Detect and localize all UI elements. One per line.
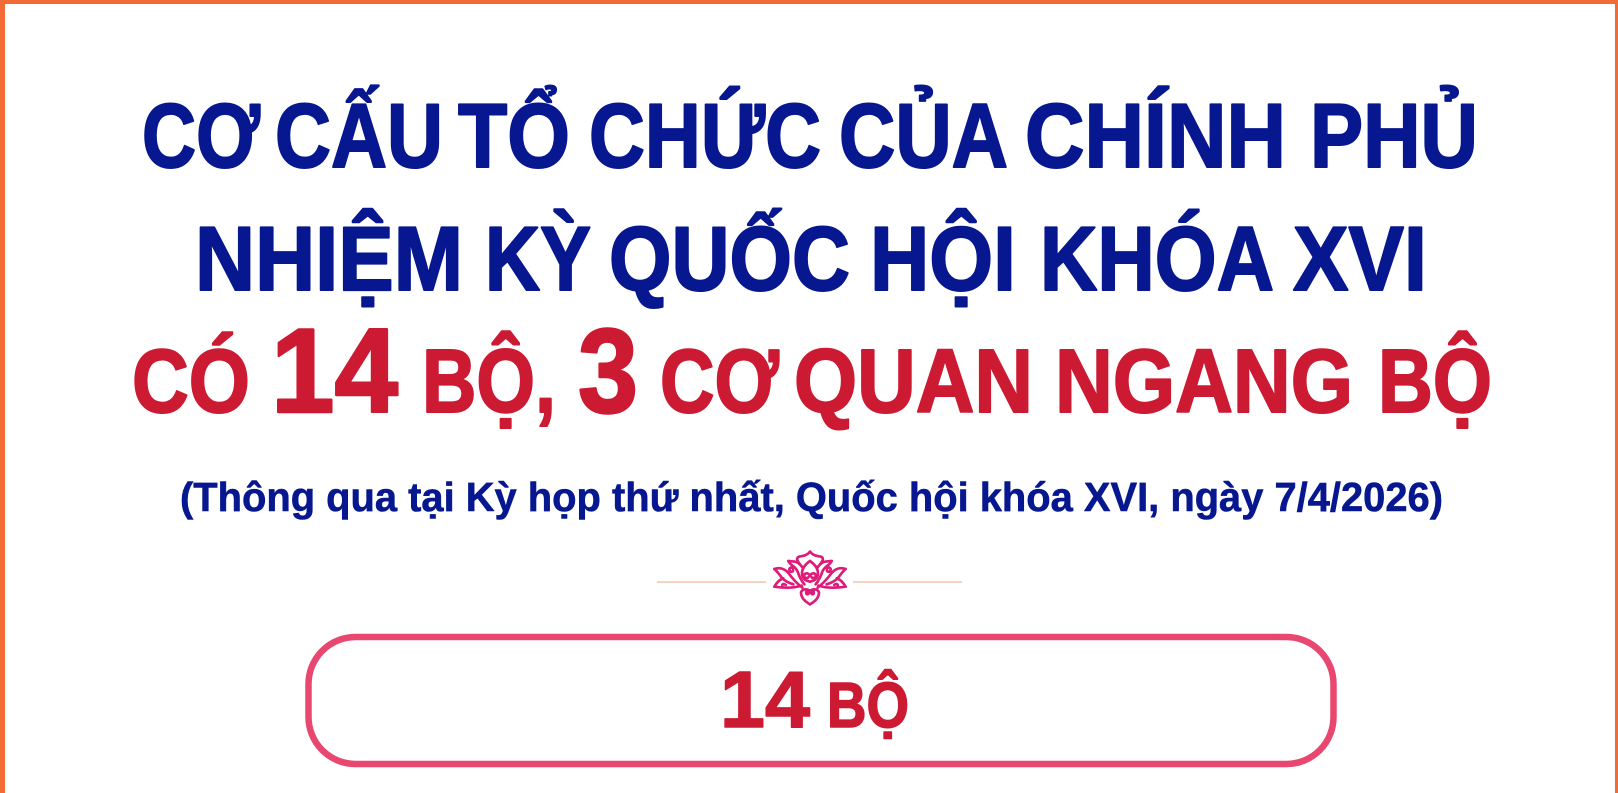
title: line 1: CHÍNH (1025, 86, 1286, 187)
headline: 14 ministries, 3 ministerial-level agencies: BỘ, (422, 330, 556, 432)
title: line 1: CHỨC (589, 86, 821, 187)
headline: 14 ministries, 3 ministerial-level agencies: 3 (578, 304, 638, 438)
title: line 2: XVI (1293, 209, 1427, 310)
title: line 2 (195, 208, 1427, 310)
title: line 1: CƠ (142, 86, 260, 187)
title: line 2: KHÓA (1040, 209, 1274, 310)
panel: 14 ministries (308, 637, 1334, 764)
headline: 14 ministries, 3 ministerial-level agencies: QUAN (794, 332, 1033, 432)
headline: 14 ministries, 3 ministerial-level agencies: BỘ (1378, 330, 1492, 432)
title: line 1: CỦA (839, 85, 1008, 187)
panel heading: 14 BỘ: 14 (720, 655, 811, 744)
subtitle: (Thông qua tại Kỳ họp thứ nhất, Quốc hội khóa XVI, ngày 7/4/2026) (180, 474, 1443, 520)
title: line 1: TỔ (458, 85, 570, 187)
title: line 2: NHIỆM (195, 208, 463, 310)
headline: 14 ministries, 3 ministerial-level agencies: 14 (271, 304, 398, 438)
headline: 14 ministries, 3 ministerial-level agencies: NGANG (1055, 332, 1353, 432)
icon: lotus (774, 552, 846, 604)
headline: 14 ministries, 3 ministerial-level agencies (132, 304, 1492, 438)
title: line 2: HỘI (870, 208, 1016, 310)
panel heading: 14 BỘ (720, 655, 909, 744)
headline: 14 ministries, 3 ministerial-level agencies: CÓ (132, 331, 250, 432)
title: line 1: CẤU (275, 85, 443, 187)
title: line 1 (142, 85, 1478, 187)
lotus divider (657, 552, 962, 604)
panel heading: 14 BỘ: BỘ (827, 668, 909, 741)
title: line 2: QUỐC (609, 208, 850, 310)
title: line 2: KỲ (485, 209, 591, 310)
title: line 1: PHỦ (1310, 85, 1478, 187)
headline: 14 ministries, 3 ministerial-level agencies: CƠ (660, 332, 779, 432)
